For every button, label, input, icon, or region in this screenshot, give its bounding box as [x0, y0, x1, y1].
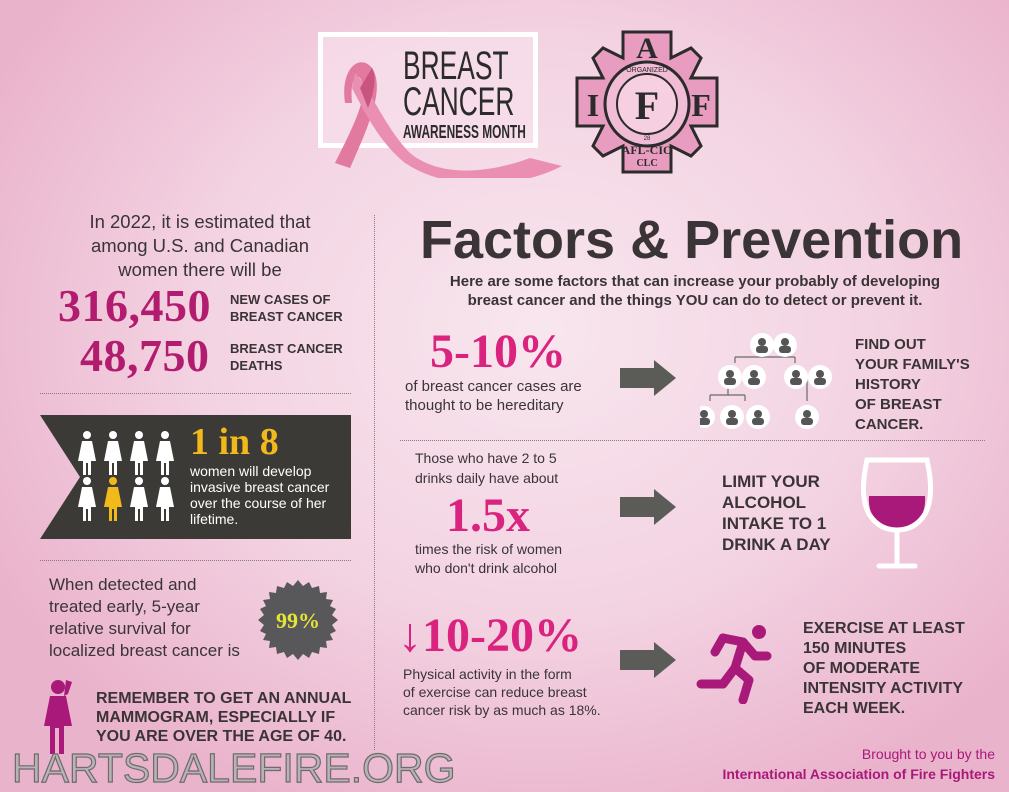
row: exercise: Physical activity in the form: [403, 666, 572, 682]
stat: deaths: DEATHS: [230, 358, 282, 373]
panel: 1 in 8 banner: [40, 415, 351, 539]
icon: family tree: [700, 333, 832, 429]
row: alcohol: DRINK A DAY: [722, 535, 831, 554]
row: exercise: 150 MINUTES: [803, 640, 906, 657]
text: mammogram reminder: YOU ARE OVER THE AGE OF 40.: [96, 728, 346, 745]
footer credit: Brought to you by the: [862, 746, 995, 762]
icon: woman thinking: [44, 680, 72, 754]
text: mammogram reminder: MAMMOGRAM, ESPECIALLY IF: [96, 709, 335, 726]
footer credit: [722, 746, 995, 782]
icon: IAFF logo: F: [635, 83, 659, 128]
icon: IAFF logo: I: [587, 87, 599, 123]
stat: new cases: [58, 280, 343, 331]
row: alcohol: [415, 450, 933, 576]
stat: new cases: BREAST CANCER: [230, 309, 343, 324]
row: exercise: of exercise can reduce breast: [403, 684, 587, 700]
row: alcohol: LIMIT YOUR: [722, 472, 820, 491]
icon: IAFF logo: AFL-CIO: [622, 143, 672, 157]
icon: 99% starburst: [258, 580, 338, 660]
icon: IAFF logo: ORGANIZED: [626, 67, 668, 74]
icon: wine glass: [861, 458, 933, 568]
header frame with ribbon: [318, 32, 562, 178]
stat: new cases: 316,450: [58, 280, 211, 331]
title: Factors & Prevention: [420, 210, 963, 270]
stat: new cases: NEW CASES OF: [230, 292, 330, 307]
icon: IAFF logo: F: [691, 87, 711, 123]
stat: deaths: BREAST CANCER: [230, 341, 343, 356]
row: alcohol: who don't drink alcohol: [415, 560, 557, 576]
text: breast cancer awareness month: CANCER: [403, 80, 514, 124]
subtitle: [450, 273, 940, 309]
icon: runner: [696, 625, 772, 704]
arrow: [620, 360, 676, 396]
icon: IAFF logo: CLC: [636, 158, 658, 169]
arrow: [620, 642, 676, 678]
icon: 99% starburst: 99%: [276, 608, 320, 633]
row: hereditary: 5-10%: [430, 325, 566, 378]
icon: women figures: [78, 431, 174, 521]
row: exercise: INTENSITY ACTIVITY: [803, 680, 963, 697]
text: breast cancer awareness month: BREAST: [403, 44, 509, 88]
row: hereditary: HISTORY: [855, 376, 921, 393]
icon: IAFF logo: [576, 30, 718, 174]
arrow: [620, 489, 676, 525]
intro text: In 2022, it is estimated that among U.S. and Canadian women there will be: [89, 211, 311, 280]
text: breast cancer awareness month: [403, 44, 526, 142]
row: hereditary: OF BREAST: [855, 396, 942, 413]
row: exercise: EACH WEEK.: [803, 700, 905, 717]
row: hereditary: thought to be hereditary: [405, 397, 563, 414]
row: alcohol: times the risk of women: [415, 541, 562, 557]
stat: deaths: [80, 330, 343, 381]
row: alcohol: ALCOHOL: [722, 493, 806, 512]
row: hereditary: CANCER.: [855, 416, 923, 433]
row: hereditary: YOUR FAMILY'S: [855, 356, 970, 373]
row: alcohol: INTAKE TO 1: [722, 514, 826, 533]
subtitle: breast cancer and the things YOU can do to detect or prevent it.: [468, 292, 922, 309]
panel: 1 in 8 banner: women will develop invasive breast cancer over the course of her lifetime.: [190, 463, 329, 527]
text: mammogram reminder: REMEMBER TO GET AN ANNUAL: [96, 690, 351, 707]
row: exercise: ↓10-20%: [398, 609, 582, 662]
panel: 1 in 8 banner: 1 in 8: [190, 421, 279, 463]
icon: IAFF logo: 28: [644, 136, 651, 142]
row: exercise: EXERCISE AT LEAST: [803, 620, 965, 637]
footer credit: International Association of Fire Fighters: [722, 766, 995, 782]
text: breast cancer awareness month: AWARENESS MONTH: [403, 122, 526, 142]
stat: deaths: 48,750: [80, 330, 210, 381]
subtitle: Here are some factors that can increase your probably of developing: [450, 273, 940, 290]
icon: IAFF logo: A: [636, 32, 658, 65]
text: mammogram reminder: [96, 690, 351, 745]
row: exercise: cancer risk by as much as 18%.: [403, 702, 601, 718]
row: exercise: [398, 609, 965, 718]
row: alcohol: Those who have 2 to 5: [415, 450, 557, 466]
text: survival: When detected and treated early, 5-year relative survival for localized breast cancer is: [49, 575, 240, 660]
row: alcohol: 1.5x: [446, 489, 530, 542]
row: exercise: OF MODERATE: [803, 660, 920, 677]
row: alcohol: drinks daily have about: [415, 470, 558, 486]
icon: pink ribbon: [335, 62, 562, 178]
row: hereditary: FIND OUT: [855, 336, 926, 353]
row: hereditary: [405, 325, 970, 433]
row: hereditary: of breast cancer cases are: [405, 378, 582, 395]
watermark: HARTSDALEFIRE.ORG: [12, 745, 456, 791]
